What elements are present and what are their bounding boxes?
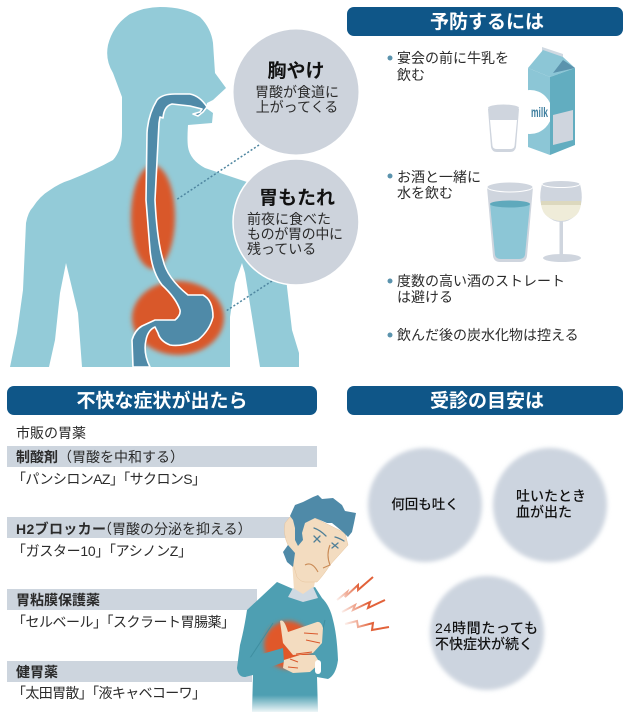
- neck: [292, 560, 316, 596]
- icon: glass of milk: [488, 104, 519, 152]
- medicine list: [7, 425, 317, 701]
- criterion: discomfort lasting 24 hours: 24時間たっても: [435, 620, 538, 636]
- heading: when symptoms appear: 不快な症状が出たら: [76, 389, 248, 412]
- callout: heartburn: 胃酸が食道に: [255, 84, 339, 100]
- callout: stomach heaviness: 前夜に食べた: [247, 211, 331, 227]
- medicine: mucosal protectants: 胃粘膜保護薬: [16, 592, 100, 608]
- callout: stomach heaviness: 胃もたれ: [259, 187, 335, 209]
- medicine: H2 blockers: （胃酸の分泌を抑える）: [98, 521, 252, 537]
- criterion: blood when vomiting: [493, 448, 607, 562]
- criterion: blood when vomiting: 吐いたとき: [516, 488, 586, 504]
- leader line: stomach heaviness: [226, 281, 272, 311]
- forearm: [238, 648, 284, 677]
- icon: glass of water: [487, 182, 533, 262]
- back hair: [283, 545, 295, 567]
- criterion: discomfort lasting 24 hours: 不快症状が続く: [435, 636, 533, 652]
- callout: stomach heaviness: [233, 159, 359, 285]
- criterion: discomfort lasting 24 hours: [430, 576, 544, 690]
- medicine: antacids: [7, 446, 317, 487]
- medicine: H2 blockers: 「ガスター10」「アシノンZ」: [12, 543, 192, 559]
- medicine: mucosal protectants: [7, 589, 257, 630]
- medicine: antacids: 「パンシロンAZ」「サクロンS」: [12, 471, 206, 487]
- item: water with alcohol: [388, 169, 481, 201]
- shirt cuff: [315, 660, 321, 674]
- pain zigzags: [337, 577, 389, 630]
- label: over-the-counter stomach medicine: 市販の胃薬: [16, 425, 86, 441]
- medicine: digestive tonics: [7, 661, 252, 701]
- heading: prevention: 予防するには: [430, 11, 544, 33]
- medicine: digestive tonics: 「太田胃散」「液キャベコーワ」: [12, 685, 206, 701]
- chest pain glow: [264, 621, 312, 669]
- callout: stomach heaviness: ものが胃の中に: [247, 226, 343, 242]
- heading: when symptoms appear: [7, 386, 317, 415]
- item: milk before party: 宴会の前に牛乳を: [397, 50, 509, 66]
- eyes and brows: [314, 528, 344, 548]
- lower hand: [283, 655, 320, 673]
- item: limit carbs: 飲んだ後の炭水化物は控える: [397, 327, 579, 343]
- anatomy illustration: torso with digestive tract: [10, 7, 299, 367]
- callout: stomach heaviness: 残っている: [247, 241, 316, 257]
- medicine: digestive tonics: 健胃薬: [16, 664, 58, 680]
- item: avoid straight strong liquor: は避ける: [397, 289, 453, 305]
- sweater: [237, 582, 338, 712]
- item: avoid straight strong liquor: [388, 273, 565, 305]
- leader line: heartburn: [176, 145, 259, 200]
- esophagus and stomach: [132, 94, 213, 367]
- shirt collar: [288, 587, 318, 602]
- item: water with alcohol: 水を飲む: [397, 185, 453, 201]
- callout: heartburn: [234, 30, 358, 154]
- arm shadow lines: [250, 620, 325, 658]
- callout: heartburn: 上がってくる: [256, 99, 338, 115]
- hair: [290, 495, 356, 546]
- heading: when to see a doctor: [347, 386, 623, 415]
- item: milk before party: 飲む: [397, 67, 425, 83]
- criterion: blood when vomiting: 血が出た: [516, 504, 572, 520]
- medicine: antacids: 制酸剤（胃酸を中和する）: [16, 449, 184, 465]
- medicine: H2 blockers: [7, 517, 297, 559]
- illustration: man holding his chest: [237, 495, 389, 712]
- criterion: repeated vomiting: 何回も吐く: [391, 497, 459, 512]
- face and ear: [284, 517, 348, 582]
- icon: milk carton: milk: [531, 104, 548, 120]
- heading: when to see a doctor: 受診の目安は: [430, 389, 544, 412]
- heartburn glow on the chest: [131, 165, 175, 269]
- finger creases: [288, 633, 320, 668]
- upper hand: [280, 620, 323, 655]
- nose and mouth: [305, 545, 330, 572]
- prevention list: [388, 50, 579, 343]
- stomach glow: [132, 281, 224, 355]
- heading: prevention: [347, 7, 623, 36]
- item: water with alcohol: お酒と一緒に: [397, 169, 481, 185]
- item: avoid straight strong liquor: 度数の高い酒のストレート: [397, 273, 565, 289]
- icon: milk carton: [528, 47, 575, 155]
- item: milk before party: [388, 50, 509, 83]
- medicine: H2 blockers: H2ブロッカー: [16, 521, 106, 537]
- icon: wine glass: [540, 180, 582, 262]
- medicine: mucosal protectants: 「セルベール」「スクラート胃腸薬」: [12, 614, 235, 630]
- body silhouette: [10, 7, 299, 367]
- callout: heartburn: 胸やけ: [267, 60, 325, 82]
- criterion: repeated vomiting: [368, 448, 482, 562]
